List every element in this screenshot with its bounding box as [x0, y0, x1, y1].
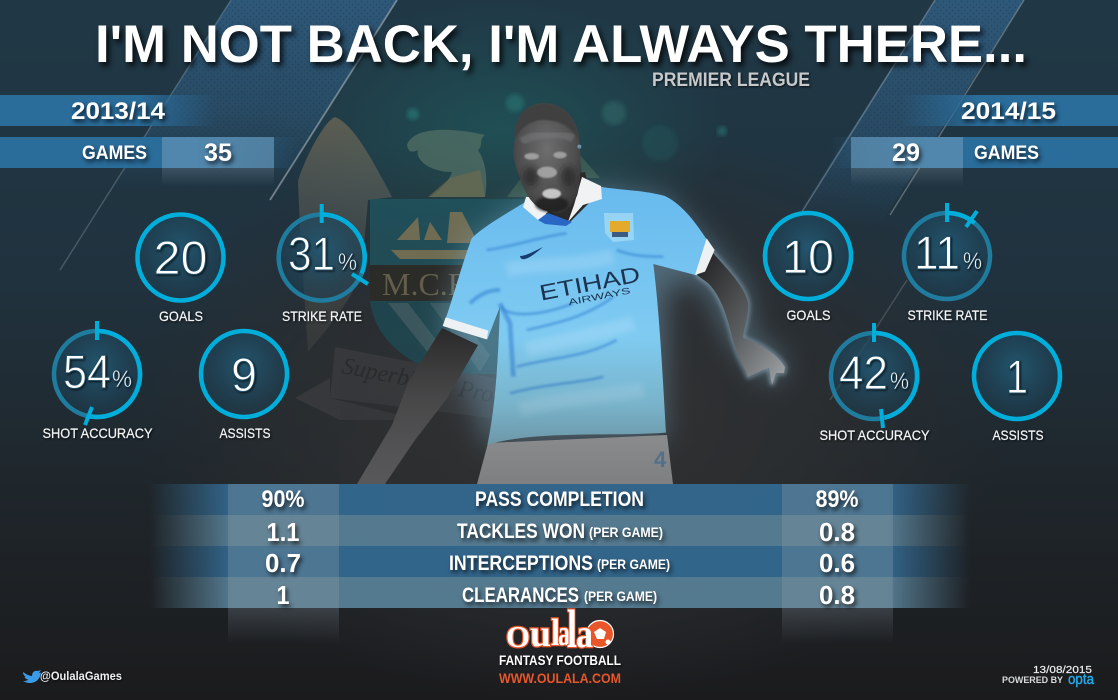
stat: strike rate 2014/15: STRIKE RATE: [908, 307, 988, 323]
table row: pass completion: [262, 486, 858, 513]
title: I'M NOT BACK, I'M ALWAYS THERE...: [95, 15, 1027, 74]
logo: wordmark: O: [506, 619, 530, 654]
crest: shield: [370, 199, 530, 265]
player: sponsor text: [537, 262, 643, 312]
player: shorts: [477, 435, 673, 484]
table row: clearances: 0.8: [819, 580, 855, 610]
panel: 2014/15 games: [830, 137, 1118, 186]
date: 13/08/2015: [1033, 664, 1092, 676]
panel: comparison table: [150, 484, 970, 644]
table row: clearances: CLEARANCES: [462, 584, 579, 607]
logo: wordmark: [506, 599, 593, 659]
player: right cheek shadow: [561, 166, 576, 187]
panel: 2013/14 header: 2013/14: [71, 98, 165, 125]
table: value columns: [228, 484, 893, 644]
crest: right edge marks: [507, 155, 600, 197]
panel: 2013/14 header: [0, 95, 215, 126]
table: row backgrounds: [150, 484, 970, 608]
table row: interceptions: (PER GAME): [597, 556, 670, 572]
player: right arm glow: [697, 253, 785, 385]
player: sleeve cuffs: [443, 238, 715, 339]
stat: strike rate 2014/15: %: [963, 248, 982, 275]
panel: 2013/14 games: [0, 137, 300, 186]
stat: strike rate 2013/14: STRIKE RATE: [282, 308, 362, 324]
stat: strike rate 2013/14: 31: [288, 227, 335, 280]
logo: Oulala: [506, 599, 614, 659]
player: club badge on shirt: [604, 213, 634, 242]
stat: shot accuracy 2013/14: 54: [63, 345, 111, 398]
logo: wordmark: a: [558, 613, 570, 653]
panel: 2014/15 header: [900, 95, 1118, 126]
logo: wordmark: l: [567, 599, 577, 659]
credit: powered by opta: opta: [1068, 671, 1095, 688]
stat: shot accuracy 2013/14: SHOT ACCURACY: [42, 425, 153, 441]
player: left cheek shadow: [523, 167, 539, 187]
panel: 2013/14 games: GAMES: [82, 143, 147, 164]
player: forehead highlights: [522, 134, 573, 142]
credit: powered by opta: [1002, 671, 1095, 688]
stat: strike rate 2013/14: %: [338, 249, 357, 276]
panel: 2014/15 header: 2014/15: [961, 98, 1056, 125]
player: right arm: [697, 253, 785, 385]
table row: interceptions: INTERCEPTIONS: [449, 552, 593, 575]
crest: motto scroll: Superbia In Proelia: [340, 353, 531, 415]
player: shirt folds: [470, 233, 663, 393]
player: mouth: [542, 189, 561, 199]
diagonal hex band: right: [791, 0, 1024, 400]
player: lower fade: [340, 340, 700, 484]
player photo illustration: [340, 103, 787, 484]
player: swoosh: [520, 247, 543, 259]
stat: shot accuracy 2014/15: [820, 323, 930, 443]
table row: clearances: 1: [276, 580, 290, 610]
player: neck: [530, 172, 592, 222]
ghost club crest: [295, 117, 600, 422]
player: beard: [535, 196, 568, 212]
stat: strike rate 2014/15: [904, 203, 990, 323]
crest: left wing: [298, 117, 392, 352]
player: shirt pale highlights: [507, 257, 643, 410]
player: sponsor text: ETIHAD: [537, 262, 642, 306]
table row: interceptions: 0.6: [819, 548, 855, 578]
stat: assists 2014/15: 1: [1006, 350, 1028, 403]
player: shirt: [443, 187, 714, 445]
stat: strike rate 2013/14: [279, 204, 368, 324]
stat: assists 2014/15: [974, 333, 1060, 443]
table row: tackles won: 0.8: [819, 517, 855, 547]
subtitle: PREMIER LEAGUE: [652, 70, 810, 91]
table row: interceptions: 0.7: [265, 548, 301, 578]
player: left arm: [357, 328, 478, 484]
logo: football: [586, 620, 614, 648]
icon: twitter bird: [23, 670, 41, 683]
logo: wordmark: u: [530, 613, 551, 655]
table row: pass completion: PASS COMPLETION: [475, 488, 644, 511]
player: number on shorts: 4: [654, 447, 667, 472]
stat: goals 2014/15: 10: [782, 230, 834, 283]
crest: motto scroll: [295, 347, 531, 422]
player: head: [513, 103, 581, 213]
player: collar: [523, 177, 602, 222]
crest: ship: [391, 212, 486, 259]
table row: pass completion: 89%: [816, 486, 858, 513]
crest: initials band: M.C.F: [382, 266, 466, 302]
table row: pass completion: 90%: [262, 486, 304, 513]
stat: assists 2013/14: [201, 331, 287, 441]
stat: goals 2014/15: [765, 213, 851, 323]
stat: strike rate 2014/15: 11: [914, 226, 960, 279]
stat: assists 2013/14: ASSISTS: [220, 425, 270, 441]
stat: goals 2014/15: GOALS: [786, 307, 830, 323]
player: hair: [515, 103, 579, 142]
stat: goals 2013/14: [138, 214, 224, 324]
table row: tackles won: TACKLES WON: [457, 520, 585, 543]
table row: clearances: (PER GAME): [584, 588, 657, 604]
stat: shot accuracy 2013/14: [42, 321, 153, 441]
panel: 2014/15 games: 29: [892, 139, 920, 167]
player: sponsor text: AIRWAYS: [567, 286, 631, 307]
stat: shot accuracy 2014/15: SHOT ACCURACY: [820, 427, 930, 443]
website link: WWW.OULALA.COM: [499, 670, 621, 686]
table row: clearances: [276, 580, 855, 610]
crest: lower stripes: [370, 301, 500, 374]
crest: initials band: [370, 265, 520, 302]
panel: 2014/15 games: GAMES: [974, 143, 1039, 164]
player: earring: [577, 145, 581, 149]
player: glow: [443, 187, 787, 447]
credit: powered by opta: POWERED BY: [1002, 675, 1064, 686]
stat: goals 2013/14: 20: [154, 231, 208, 284]
panel: 2013/14 games: 35: [204, 139, 232, 167]
table row: interceptions: [265, 548, 855, 578]
logo: wordmark: l: [551, 612, 560, 654]
player: left eye: [524, 153, 539, 160]
player: right eye: [553, 152, 567, 158]
stat: shot accuracy 2014/15: %: [890, 368, 909, 395]
player: nose: [537, 167, 557, 178]
logo tagline: FANTASY FOOTBALL: [499, 652, 621, 668]
table row: tackles won: [266, 517, 855, 547]
diagonal hex band: left: [60, 0, 397, 270]
twitter handle: @OulalaGames: [40, 669, 122, 683]
table row: tackles won: 1.1: [266, 517, 300, 547]
stat: goals 2013/14: GOALS: [159, 308, 203, 324]
stat: shot accuracy 2014/15: 42: [839, 346, 888, 399]
table row: tackles won: (PER GAME): [589, 524, 663, 540]
stat: assists 2013/14: 9: [231, 348, 257, 401]
stat: assists 2014/15: ASSISTS: [992, 427, 1044, 443]
logo: wordmark: a: [576, 611, 593, 656]
crest: eagle: [407, 130, 486, 197]
stat: shot accuracy 2013/14: %: [112, 366, 132, 393]
player: collar inner: [538, 213, 572, 226]
